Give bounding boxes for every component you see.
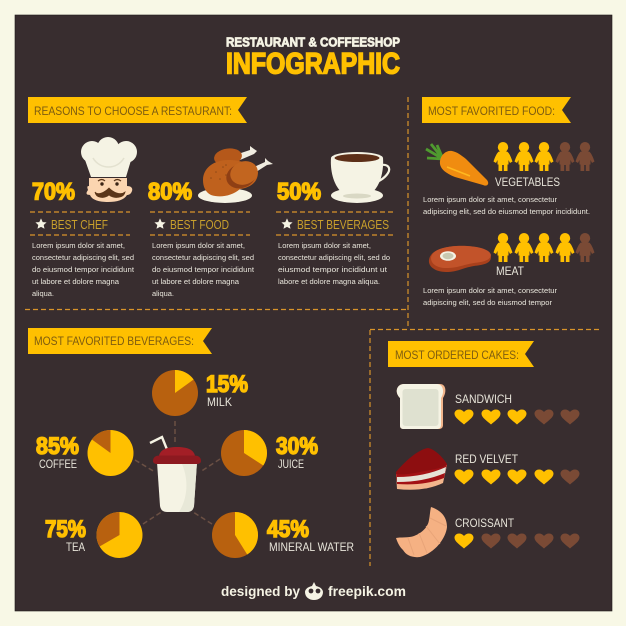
- footer credit: freepik.com: [328, 584, 406, 599]
- icon: roast chicken: [198, 146, 273, 203]
- rating: sandwich 3 of 5: [454, 410, 580, 424]
- label: best chef: BEST CHEF: [51, 217, 108, 232]
- text: vegetables description: Lorem ipsum dolor sit amet, consectetur: [423, 195, 557, 204]
- text: best food description: do eiusmod tempor incididunt: [152, 265, 255, 274]
- text: best chef description: Lorem ipsum dolor sit amet,: [32, 241, 125, 250]
- stat: juice: [276, 433, 318, 471]
- title: RESTAURANT & COFFEESHOP: [226, 34, 400, 50]
- panel: most ordered cakes: [388, 341, 580, 557]
- footer credit: designed by: [221, 584, 300, 599]
- stat: milk: MILK: [207, 395, 232, 409]
- stat: tea: TEA: [66, 540, 85, 554]
- label: sandwich: SANDWICH: [455, 392, 512, 406]
- rating: red velvet 4 of 5: [454, 470, 580, 484]
- icon: sandwich bread: [397, 384, 445, 429]
- icon: takeaway cup: [150, 437, 201, 512]
- title: INFOGRAPHIC: [226, 48, 400, 80]
- label: vegetables: VEGETABLES: [495, 175, 560, 189]
- text: best beverages description: [278, 241, 390, 286]
- text: best chef description: ut labore et dolore magna: [32, 277, 120, 286]
- icon: chef: [81, 137, 137, 202]
- text: best food description: Lorem ipsum dolor sit amet,: [152, 241, 245, 250]
- text: best food description: aliqua.: [152, 289, 174, 298]
- stat: coffee: 85%: [36, 433, 79, 460]
- panel: reasons to choose a restaurant: [28, 97, 393, 298]
- panel: most favorited beverages: [28, 328, 354, 558]
- stat: mineral water: [267, 516, 354, 554]
- pie chart: milk 15%: [152, 370, 198, 416]
- text: best chef description: [32, 241, 135, 298]
- icon: red velvet cake: [396, 448, 447, 490]
- text: best beverages description: labore et dolore magna aliqua.: [278, 277, 380, 286]
- text: meat description: [423, 286, 557, 307]
- pie chart: coffee 85%: [88, 430, 134, 476]
- banner: beverages: MOST FAVORITED BEVERAGES:: [34, 334, 194, 348]
- label: best beverages: [281, 217, 389, 232]
- stat: mineral water: MINERAL WATER: [269, 540, 354, 554]
- banner: cakes: [388, 341, 534, 367]
- stat: mineral water: 45%: [267, 516, 309, 543]
- label: best chef: [35, 217, 108, 232]
- text: best beverages description: Lorem ipsum dolor sit amet,: [278, 241, 371, 250]
- text: best food description: [152, 241, 255, 298]
- title: [226, 34, 400, 80]
- banner: reasons: [28, 97, 247, 123]
- text: best chef description: do eiusmod tempor incididunt: [32, 265, 135, 274]
- icon: freepik logo: [305, 582, 323, 600]
- text: best food description: consectetur adipiscing elit, sed: [152, 253, 254, 262]
- icon: coffee cup: [331, 152, 389, 203]
- text: best beverages description: consectetur adipiscing elit, sed do: [278, 253, 390, 262]
- label: best food: [154, 217, 229, 232]
- text: best chef description: aliqua.: [32, 289, 54, 298]
- stat: coffee: COFFEE: [39, 457, 77, 471]
- banner: cakes: MOST ORDERED CAKES:: [395, 348, 519, 362]
- footer credit: [221, 582, 406, 600]
- stat: 50%: 50%: [277, 178, 321, 206]
- text: vegetables description: [423, 195, 590, 216]
- text: meat description: adipiscing elit, sed do eiusmod tempor: [423, 298, 552, 307]
- stat: 80%: 80%: [148, 178, 192, 206]
- label: best beverages: BEST BEVERAGES: [297, 217, 389, 232]
- stat: tea: 75%: [45, 516, 86, 543]
- pictogram: meat 4 of 5: [494, 233, 594, 262]
- pie chart: juice 30%: [221, 430, 267, 476]
- label: red velvet: RED VELVET: [455, 452, 519, 466]
- rating: croissant 1 of 5: [454, 534, 580, 548]
- banner: food: MOST FAVORITED FOOD:: [428, 104, 555, 118]
- stat: 70%: 70%: [32, 178, 75, 206]
- pictogram: vegetables 3 of 5: [494, 142, 594, 171]
- icon: croissant: [396, 507, 447, 557]
- text: best food description: ut labore et dolore magna: [152, 277, 240, 286]
- pie chart: mineral water 45%: [212, 512, 258, 558]
- stat: juice: 30%: [276, 433, 318, 460]
- stat: coffee: [36, 433, 79, 471]
- banner: beverages: [28, 328, 212, 354]
- banner: food: [422, 97, 571, 123]
- panel: most favorited food: [422, 97, 594, 307]
- icon: carrot: [426, 144, 488, 186]
- banner: reasons: REASONS TO CHOOSE A RESTAURANT:: [34, 104, 232, 118]
- pie chart: tea 75%: [96, 512, 142, 558]
- text: best beverages description: eiusmod tempor incididunt ut: [278, 265, 388, 274]
- text: best chef description: consectetur adipiscing elit, sed: [32, 253, 134, 262]
- label: meat: MEAT: [496, 264, 525, 278]
- text: meat description: Lorem ipsum dolor sit amet, consectetur: [423, 286, 557, 295]
- stat: milk: 15%: [206, 371, 248, 398]
- icon: steak: [429, 246, 491, 272]
- text: vegetables description: adipiscing elit, sed do eiusmod tempor incididunt.: [423, 207, 590, 216]
- label: croissant: CROISSANT: [455, 516, 515, 530]
- label: best food: BEST FOOD: [170, 217, 229, 232]
- stat: juice: JUICE: [278, 457, 304, 471]
- stat: milk: [206, 371, 248, 409]
- stat: tea: [45, 516, 86, 554]
